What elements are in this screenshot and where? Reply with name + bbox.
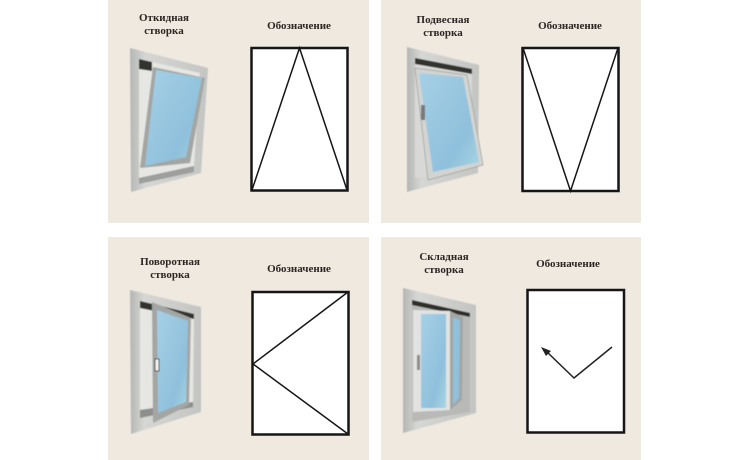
panel: folding sash xyxy=(381,237,641,460)
heading: symbol: Обозначение xyxy=(536,258,600,270)
window: folding sash xyxy=(403,288,476,433)
panel: top-hung sash xyxy=(381,0,641,223)
heading: side-hung sash xyxy=(140,256,200,281)
symbol: side-hung xyxy=(252,292,348,434)
window: top-hung sash xyxy=(407,47,483,192)
heading: top-hung sash: Подвесная xyxy=(417,14,470,26)
symbol: tilt xyxy=(252,48,348,190)
panel: tilt sash xyxy=(108,0,369,223)
heading: symbol: Обозначение xyxy=(267,20,331,32)
symbol: folding xyxy=(528,290,624,432)
heading: tilt sash: створка xyxy=(144,25,184,37)
heading: side-hung sash: Поворотная xyxy=(140,256,200,268)
panel: side-hung sash xyxy=(108,237,369,460)
symbol: top-hung xyxy=(522,48,618,191)
heading: tilt sash: Откидная xyxy=(139,12,189,24)
window: tilt sash xyxy=(130,48,208,192)
heading: folding sash: створка xyxy=(424,264,464,276)
heading: folding sash: Складная xyxy=(419,251,469,263)
heading: tilt sash xyxy=(139,12,189,37)
window: side-hung sash xyxy=(130,290,201,434)
heading: symbol: Обозначение xyxy=(538,20,602,32)
heading: side-hung sash: створка xyxy=(150,269,190,281)
heading: top-hung sash: створка xyxy=(423,27,463,39)
arrow: fold direction xyxy=(541,347,612,378)
heading: top-hung sash xyxy=(417,14,470,39)
heading: symbol: Обозначение xyxy=(267,263,331,275)
heading: folding sash xyxy=(419,251,469,276)
